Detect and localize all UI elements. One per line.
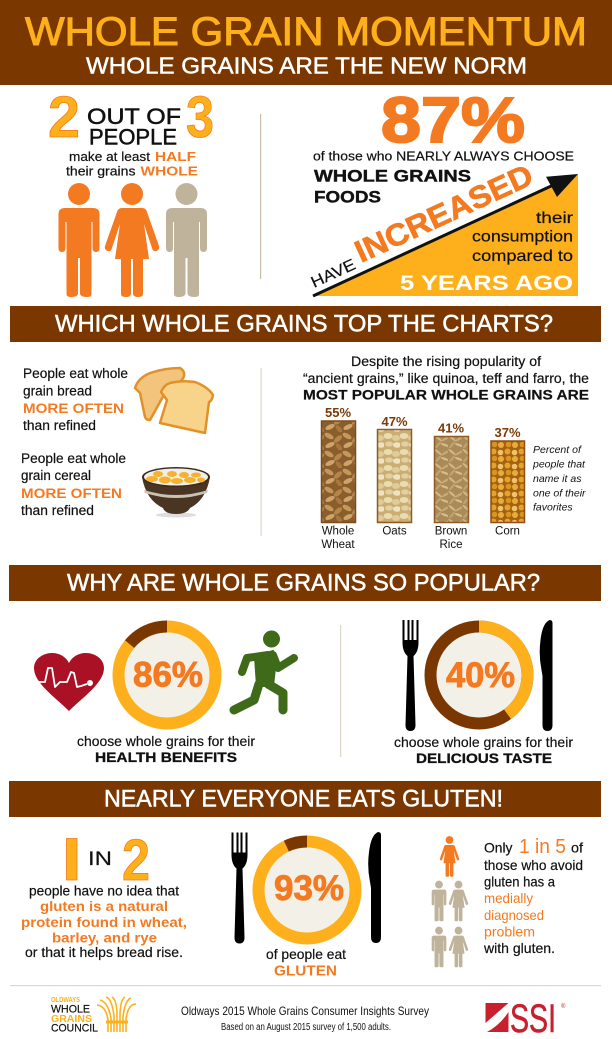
big 1 in 2: 1 [67, 828, 76, 891]
nearly always choose text: of those who NEARLY ALWAYS CHOOSE [313, 148, 574, 164]
text: people eat gluten [266, 946, 346, 980]
text: most popular whole grains: Despite the rising popularity of [351, 354, 541, 369]
logo: oldways whole grains council: WHOLE [51, 1004, 90, 1016]
section heading: why so popular [9, 565, 601, 601]
arrow [313, 174, 578, 296]
make at least half text [66, 149, 198, 178]
chart note: Percent of [533, 444, 582, 456]
consumption text: compared to [472, 248, 573, 265]
chart: favourite grains [321, 405, 586, 551]
gluten explanation text: protein found in wheat, [21, 915, 187, 930]
text: health benefits [77, 733, 255, 765]
have increased text: HAVE [309, 257, 358, 292]
chart note: people that [532, 458, 586, 470]
out of people text: OUT OF [87, 104, 181, 129]
logo: SSI [486, 997, 566, 1039]
make at least half text: WHOLE [140, 164, 198, 178]
bar: whole wheat 55 percent: Wheat [321, 539, 355, 551]
bar: oats 47 percent [378, 414, 412, 538]
panel: 1 in 2 people [21, 828, 187, 960]
big number 2: 2 [48, 85, 80, 150]
text: only 1 in 5: medially [484, 890, 533, 906]
logo: oldways whole grains council: GRAINS [51, 1013, 92, 1025]
source text [181, 1004, 429, 1033]
text: cereal more often: grain cereal [21, 468, 91, 483]
bar: brown rice 41 percent: Brown [435, 526, 467, 538]
panel: 87 percent increased [309, 84, 578, 296]
section heading: top the charts: WHICH WHOLE GRAINS TOP THE CHARTS? [55, 310, 553, 338]
text: only 1 in 5: diagnosed [484, 907, 544, 923]
section heading: top the charts [10, 306, 601, 342]
have increased text [309, 157, 538, 292]
header banner [0, 0, 612, 85]
text: only 1 in 5: gluten has a [484, 874, 555, 890]
chart note: name it as [533, 473, 582, 485]
text: only 1 in 5: with gluten. [483, 940, 555, 956]
out of people text [87, 104, 181, 150]
text: only 1 in 5: problem [484, 924, 535, 940]
text: bread more often: grain bread [23, 384, 92, 398]
bar: oats 47 percent: 47% [381, 414, 408, 429]
text: only 1 in 5: 1 in 5 [519, 836, 566, 858]
text: delicious taste: DELICIOUS TASTE [416, 750, 552, 766]
text: people eat gluten: of people eat [266, 946, 346, 962]
big 1 in 2 [66, 828, 150, 893]
make at least half text: make at least [69, 149, 150, 164]
text: most popular whole grains: MOST POPULAR WHOLE GRAINS ARE [303, 388, 589, 402]
bar: brown rice 41 percent: Rice [439, 539, 463, 551]
chart: donut 93 percent [258, 842, 356, 938]
bar: whole wheat 55 percent [321, 405, 356, 551]
text: bread more often [23, 366, 128, 433]
icon: fork [402, 620, 418, 731]
chart note: one of their [533, 488, 586, 500]
chart note [532, 444, 586, 514]
gluten explanation text: people have no idea that [29, 884, 179, 898]
chart: donut 40 percent [430, 626, 528, 724]
bar: corn 37 percent: Corn [495, 526, 520, 538]
icon: wheat sheaf [97, 997, 136, 1032]
chart: donut 86 percent: 86% [133, 656, 203, 694]
consumption text [472, 210, 574, 265]
text: cereal more often: MORE OFTEN [21, 486, 122, 501]
have increased text: INCREASED [349, 157, 538, 269]
panel: 2 out of 3 people [48, 85, 214, 297]
text: health benefits: HEALTH BENEFITS [95, 749, 237, 765]
text: only 1 in 5: of [571, 840, 583, 856]
text: most popular whole grains [303, 354, 589, 402]
text: people eat gluten: GLUTEN [274, 964, 337, 980]
gluten explanation text [21, 884, 187, 960]
text: delicious taste: choose whole grains for their [394, 734, 573, 750]
5 years ago: 5 YEARS AGO [400, 272, 573, 295]
section heading: eats gluten: NEARLY EVERYONE EATS GLUTEN! [104, 786, 503, 812]
consumption text: their [536, 210, 574, 227]
bar: brown rice 41 percent [434, 420, 468, 551]
logo: oldways whole grains council: OLDWAYS [51, 995, 80, 1004]
text: only 1 in 5 [483, 836, 583, 956]
bar: whole wheat 55 percent: 55% [325, 405, 351, 420]
text: delicious taste [394, 734, 573, 766]
text: bread more often: MORE OFTEN [23, 401, 124, 416]
whole grains foods text: WHOLE GRAINS [314, 166, 471, 186]
whole grains foods text: FOODS [314, 188, 381, 206]
out of people text: PEOPLE [89, 124, 177, 150]
consumption text: consumption [472, 228, 573, 246]
rising triangle [313, 174, 578, 296]
bar: whole wheat 55 percent: Whole [322, 526, 354, 538]
87 percent figure: 87% [381, 84, 525, 156]
text: most popular whole grains: “ancient grains,” like quinoa, teff and farro, the [303, 371, 589, 386]
make at least half text: their grains [66, 164, 136, 178]
title: WHOLE GRAIN MOMENTUM [25, 10, 587, 54]
text: cereal more often [21, 451, 126, 518]
text: health benefits: choose whole grains for their [77, 733, 255, 749]
gluten explanation text: gluten is a natural [40, 899, 168, 914]
chart: donut 86 percent [118, 626, 216, 724]
bar: brown rice 41 percent: 41% [438, 420, 464, 436]
text: only 1 in 5: those who avoid [484, 857, 583, 873]
logo: oldways whole grains council [51, 995, 136, 1034]
bar: oats 47 percent: Oats [382, 526, 407, 538]
text: bread more often: than refined [23, 418, 96, 433]
text: cereal more often: than refined [21, 503, 94, 518]
icon: knife [540, 620, 552, 731]
logo: oldways whole grains council: COUNCIL [51, 1022, 98, 1034]
big 1 in 2: 2 [122, 828, 150, 893]
whole grains foods text [314, 166, 471, 206]
big 1 in 2: IN [88, 849, 112, 870]
gluten explanation text: barley, and rye [52, 930, 158, 946]
icon: three people [58, 183, 207, 297]
make at least half text: HALF [155, 149, 196, 164]
icon: runner [234, 630, 294, 710]
source text: Based on an August 2015 survey of 1,500 adults. [221, 1022, 391, 1033]
bar: corn 37 percent [491, 425, 524, 538]
bar: corn 37 percent: 37% [494, 425, 521, 440]
big number 3: 3 [186, 85, 214, 150]
logo: SSI: ® [561, 1003, 566, 1010]
text: bread more often: People eat whole [23, 366, 128, 381]
gluten explanation text: or that it helps bread rise. [25, 945, 183, 960]
source text: Oldways 2015 Whole Grains Consumer Insights Survey [181, 1004, 429, 1018]
icon: knife [368, 832, 381, 943]
icon: heart with pulse [34, 653, 104, 711]
chart: donut 40 percent: 40% [446, 656, 515, 695]
section heading: eats gluten [9, 781, 601, 817]
chart note: favorites [533, 502, 573, 514]
icon: bread slices [135, 368, 213, 433]
text: only 1 in 5: Only [484, 840, 512, 856]
section heading: why so popular: WHY ARE WHOLE GRAINS SO POPULAR? [67, 570, 540, 596]
chart: donut 93 percent: 93% [274, 869, 344, 908]
subtitle: WHOLE GRAINS ARE THE NEW NORM [86, 52, 527, 78]
icon: five people [432, 836, 468, 967]
text: cereal more often: People eat whole [21, 451, 126, 466]
icon: fork [232, 832, 248, 944]
icon: cereal bowl [142, 467, 210, 518]
